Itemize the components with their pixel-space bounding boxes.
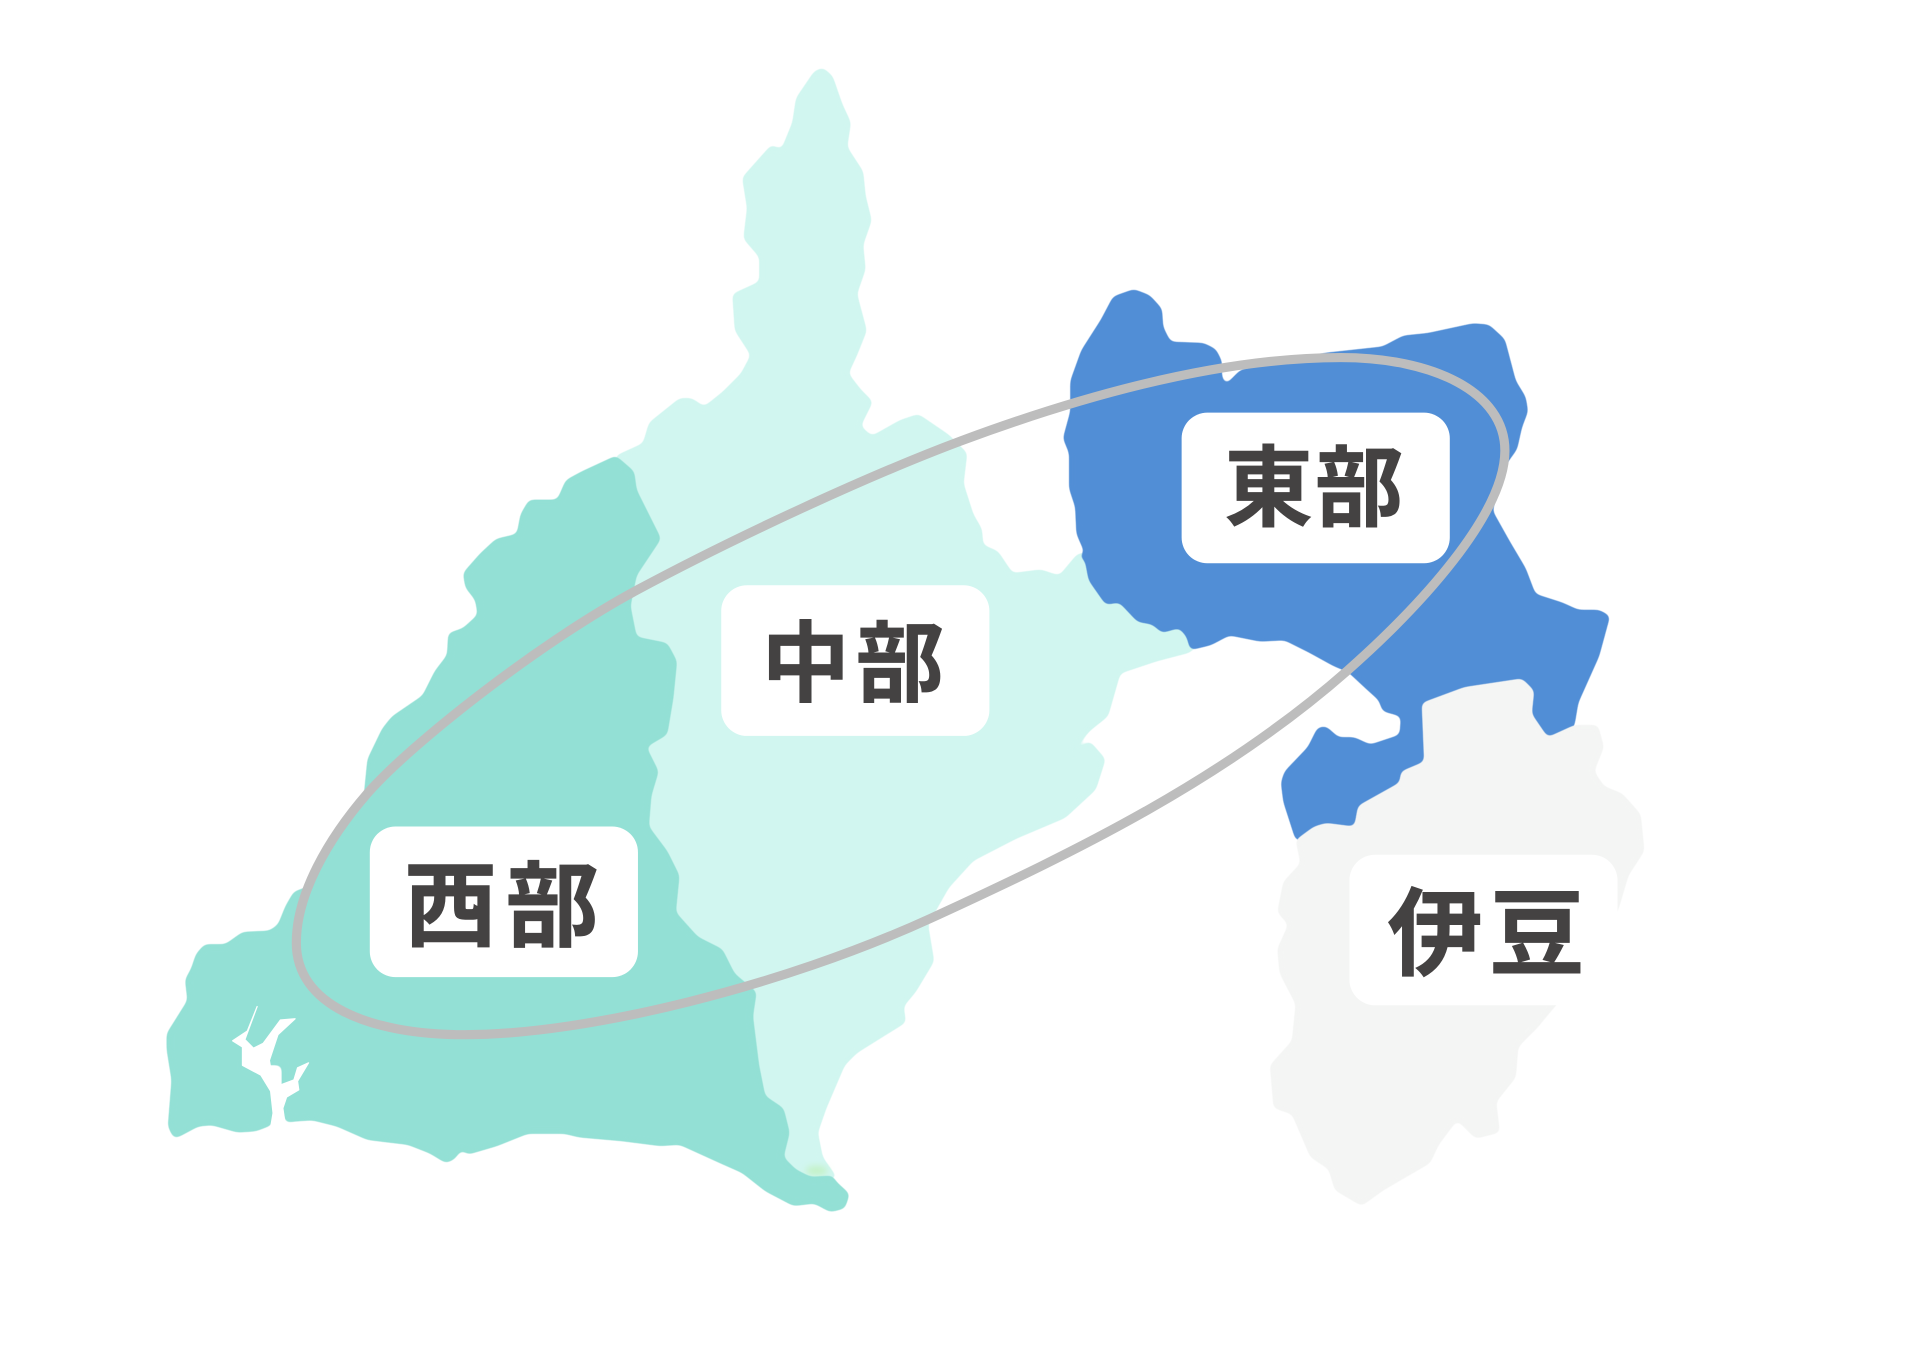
region: Izu (伊豆) — [1270, 678, 1644, 1206]
label: 伊豆: 伊豆 — [1387, 882, 1584, 988]
label: 中部 — [721, 585, 989, 736]
label: 中部: 中部 — [762, 614, 944, 713]
region: south tip highlight — [806, 1166, 828, 1176]
region: west (西部) — [167, 456, 850, 1212]
label: 西部: 西部 — [404, 855, 599, 959]
region: central (中部) — [588, 67, 1206, 1188]
label: 伊豆 — [1349, 855, 1618, 1005]
region: east (東部) — [1063, 289, 1610, 847]
west bay cutout — [233, 1007, 309, 1128]
label: 西部 — [370, 827, 638, 977]
label: 東部: 東部 — [1224, 439, 1403, 538]
label: 東部 — [1182, 413, 1450, 563]
ellipse outline: central corridor — [296, 358, 1505, 1035]
